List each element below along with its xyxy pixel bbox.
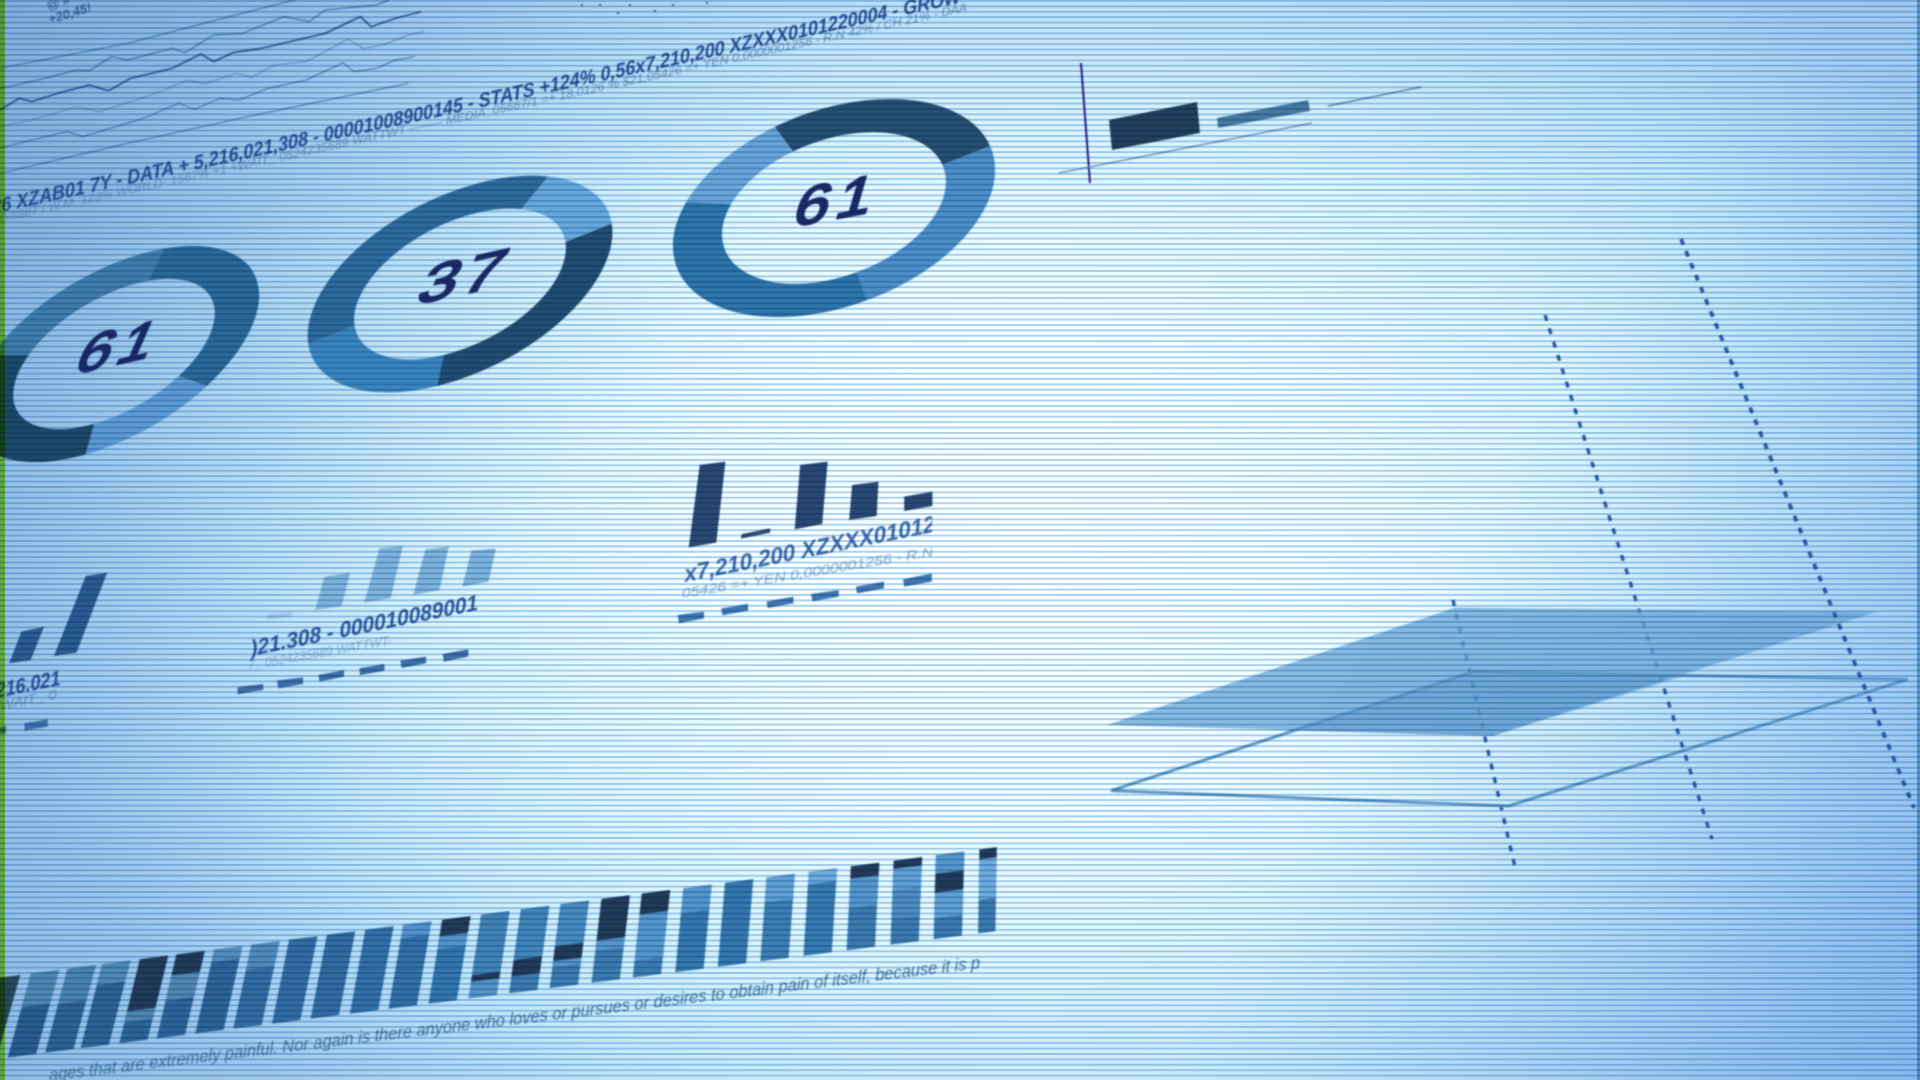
bar chart group: right <box>678 462 937 623</box>
donut chart: 61 left <box>0 225 267 483</box>
donut chart: 37 middle <box>302 154 618 414</box>
data ticker subline: 0/8887 / W.M. 123% WORLD- 1567% +1 +WAIT_ 0524235689 WATTWT -------- MEDIA_05667/1 =+ 18,0126 % $21,05426 =+ YEN 0,0000001256 - R.N 42% / CH 21% - DAA <box>0 0 968 225</box>
value 61: 61 <box>66 306 176 387</box>
dotted guide lines: back <box>1453 315 1712 867</box>
donut chart: 61 right <box>672 80 996 336</box>
value 37: 37 <box>409 235 523 317</box>
right bar caption: 05426 =+ YEN 0,0000001256 - R.N <box>681 544 934 601</box>
bar chart group: middle <box>238 546 496 694</box>
chart value label: +20,45! <box>46 0 94 27</box>
plane chart: filled and outlined layers <box>1107 608 1908 806</box>
right dash row <box>678 573 932 623</box>
tick marks at top <box>581 2 708 14</box>
middle bar sublabel: 7_ 0524235689 WATTWT- <box>248 632 392 673</box>
small bar chart: top right <box>1059 63 1421 183</box>
value 61: 61 <box>787 161 890 239</box>
bar chart group: left <box>0 573 107 734</box>
stacked bars strip: bottom <box>0 847 997 1063</box>
dotted guide line: front <box>1681 239 1914 808</box>
middle dash row <box>238 649 468 694</box>
middle bar caption: )21.308 - 000010089001 <box>248 590 479 661</box>
right bar caption: x7,210,200 XZXXX01012 <box>681 510 937 587</box>
line chart: stock traces top left <box>0 0 424 173</box>
left bar sublabel: WAIT_ 0 <box>0 686 58 713</box>
